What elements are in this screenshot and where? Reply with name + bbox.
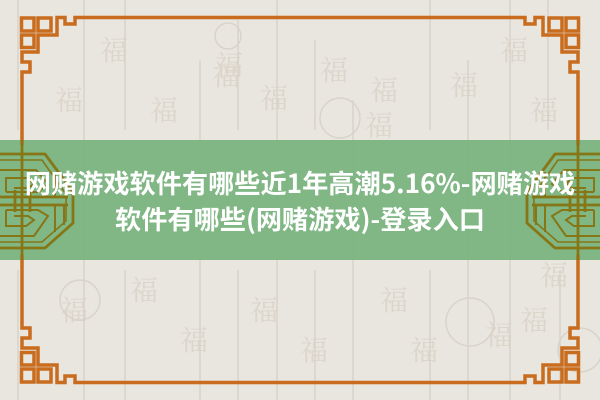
paper background with watermark: 福 bbox=[100, 29, 128, 69]
paper background with watermark: 福 bbox=[540, 254, 568, 294]
paper background with watermark: 福 bbox=[215, 44, 243, 84]
paper background with watermark: 福 bbox=[300, 329, 328, 369]
paper background with watermark: 福 bbox=[485, 314, 513, 354]
paper background with watermark: 福 bbox=[260, 77, 288, 117]
title line 1: 网赌游戏软件有哪些近1年高潮5.16%-网赌游戏 bbox=[25, 163, 575, 201]
paper background with watermark: 福 bbox=[370, 69, 398, 109]
paper background with watermark: 福 bbox=[500, 29, 528, 69]
paper background with watermark: 福 bbox=[320, 49, 348, 89]
paper background with watermark: 福 bbox=[410, 329, 438, 369]
paper background with watermark: 福 bbox=[180, 319, 208, 359]
paper background with watermark: 福 bbox=[380, 279, 408, 319]
paper background with watermark: 福 bbox=[212, 54, 240, 94]
paper background with watermark: 福 bbox=[130, 269, 158, 309]
paper background with watermark: 福 bbox=[530, 89, 558, 129]
paper background with watermark: 福 bbox=[150, 89, 178, 129]
green banner bbox=[0, 140, 600, 260]
paper background with watermark: 福 bbox=[250, 289, 278, 329]
paper background with watermark: 福 bbox=[450, 64, 478, 104]
paper background with watermark: 福 bbox=[60, 289, 88, 329]
title line 2: 软件有哪些(网赌游戏)-登录入口 bbox=[115, 199, 485, 237]
paper background with watermark: 福 bbox=[365, 104, 393, 144]
paper background with watermark: 福 bbox=[55, 79, 83, 119]
paper background with watermark: 福 bbox=[520, 299, 548, 339]
